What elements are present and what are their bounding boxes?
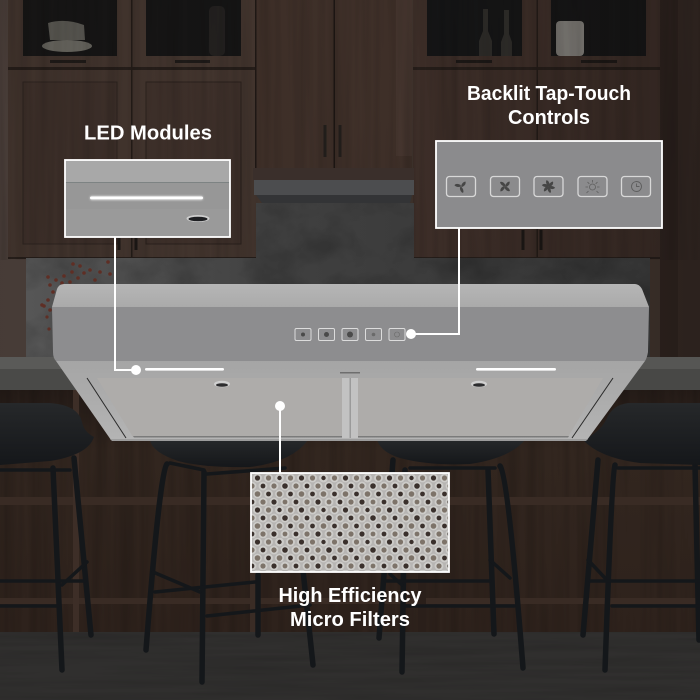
icon: timer <box>632 182 642 192</box>
handle left <box>456 60 492 63</box>
small background hood <box>253 168 414 203</box>
right filter edge <box>358 436 569 438</box>
upper right cabinets <box>413 0 660 259</box>
seat <box>377 440 525 464</box>
wall <box>0 0 700 400</box>
lower panel grain <box>0 390 700 632</box>
right LED strip <box>476 368 556 371</box>
legs <box>146 464 313 682</box>
right wall <box>660 0 700 365</box>
lower handles <box>119 238 136 250</box>
bowl <box>48 21 85 40</box>
anchor dot <box>131 365 141 375</box>
icon: fan low <box>454 182 466 193</box>
left halogen light <box>214 381 230 387</box>
inset light rim <box>186 215 210 222</box>
rail <box>8 67 256 70</box>
seat <box>0 403 94 465</box>
light rim <box>214 381 230 387</box>
right filter <box>358 378 603 437</box>
right stool <box>583 403 700 670</box>
left glass <box>23 0 117 56</box>
anchor dot <box>275 401 285 411</box>
door body <box>256 0 412 168</box>
callout: Backlit Tap-Touch Controls <box>406 82 662 339</box>
bottle one <box>479 9 492 56</box>
panel post left <box>73 390 79 632</box>
inset light lens <box>188 217 208 221</box>
rails <box>153 463 310 616</box>
right glass <box>551 0 646 56</box>
berry branch <box>40 260 112 331</box>
panel post center left <box>250 500 257 632</box>
hood top band <box>52 284 649 307</box>
left filter <box>97 378 342 437</box>
hood touch buttons <box>295 328 405 340</box>
left LED strip <box>145 368 224 371</box>
inset mesh swatch <box>251 473 449 572</box>
wooden lower panel <box>0 390 700 632</box>
rails <box>0 470 87 606</box>
handle right <box>175 60 210 63</box>
range hood <box>52 284 649 441</box>
underside bottom edge <box>110 439 588 441</box>
inset middle band <box>65 183 230 209</box>
divider <box>536 0 538 258</box>
divider <box>131 0 132 258</box>
panel post center right <box>418 505 426 632</box>
left counter front <box>0 369 100 390</box>
lower door left panel <box>23 82 117 244</box>
handles <box>325 125 340 157</box>
inset border <box>436 141 662 228</box>
center divider groove <box>350 378 351 438</box>
right counter front <box>600 369 700 390</box>
bottle two <box>501 10 512 56</box>
backsplash stone texture <box>26 203 650 361</box>
callout: High Efficiency Micro Filters <box>251 401 449 631</box>
cabinet frames <box>413 0 660 258</box>
right counter top <box>630 357 700 369</box>
connector line <box>411 228 459 334</box>
anchor dot <box>406 329 416 339</box>
right wall post <box>678 0 700 365</box>
center divider <box>342 378 358 438</box>
dark vase <box>209 6 225 56</box>
countertop <box>0 357 700 390</box>
door edge left <box>255 0 256 168</box>
left glass <box>427 0 522 56</box>
legs <box>583 460 699 670</box>
center left stool <box>146 440 313 682</box>
icon: fan medium <box>500 182 510 192</box>
left stool <box>0 403 94 670</box>
hood face <box>254 180 414 195</box>
left wall <box>0 0 26 360</box>
upper left cabinets <box>8 0 256 259</box>
right slit <box>572 378 613 438</box>
seat <box>583 403 700 465</box>
connector line <box>115 237 136 370</box>
center tall cabinets <box>255 0 412 168</box>
wood grain overlay <box>0 0 700 260</box>
panel batten lower <box>0 598 700 604</box>
icon: fan high <box>542 180 555 193</box>
bar stools <box>0 403 700 682</box>
legs <box>53 458 91 670</box>
center right stool <box>377 440 525 672</box>
door split <box>334 0 335 168</box>
heading: LED Modules <box>84 122 212 144</box>
lower handles <box>523 230 541 250</box>
brand mark <box>340 372 360 374</box>
left counter top <box>0 357 70 369</box>
hood button icons <box>301 332 400 338</box>
backsplash <box>26 203 650 360</box>
light rim <box>471 381 487 387</box>
inset top band <box>65 160 230 182</box>
heading line two: Micro Filters <box>290 608 410 631</box>
handle right <box>581 60 617 63</box>
hood top <box>253 168 414 180</box>
floor grain <box>0 632 700 700</box>
cabinet base shadow <box>413 257 660 259</box>
side shade <box>0 0 700 360</box>
cabinet frames <box>8 0 256 258</box>
right glass <box>146 0 241 56</box>
inset panel <box>436 141 662 228</box>
inset seam <box>65 182 230 183</box>
plate <box>42 40 92 52</box>
rails <box>588 468 700 606</box>
right halogen light <box>471 381 487 387</box>
hood underside <box>256 195 412 203</box>
left filter edge <box>133 436 342 438</box>
heading: Backlit Tap-Touch <box>467 82 631 105</box>
inset buttons <box>446 176 650 196</box>
ribbed vase <box>556 21 584 56</box>
heading: High Efficiency <box>278 584 422 607</box>
light lens <box>216 383 228 387</box>
floor <box>0 632 700 700</box>
left slit <box>87 378 126 438</box>
icon: light <box>586 180 600 193</box>
inset LED glow <box>90 196 203 200</box>
rails <box>385 468 514 606</box>
callout: LED Modules <box>65 122 230 375</box>
lower door right panel <box>146 82 241 244</box>
light lens <box>473 383 485 387</box>
heading line two: Controls <box>508 106 590 129</box>
door edge right <box>396 0 412 156</box>
panel batten upper <box>0 497 700 505</box>
inset panel <box>65 160 230 237</box>
hood front face <box>52 307 649 361</box>
handle left <box>50 60 86 63</box>
inset bottom band <box>65 209 230 237</box>
connector line <box>279 406 281 473</box>
rail <box>413 67 660 70</box>
hood underside <box>56 361 645 440</box>
seat <box>150 440 308 467</box>
inset border <box>65 160 230 237</box>
inset background <box>436 141 662 228</box>
inset LED bar <box>90 196 203 199</box>
cabinet base shadow <box>8 257 256 259</box>
legs <box>379 460 523 672</box>
